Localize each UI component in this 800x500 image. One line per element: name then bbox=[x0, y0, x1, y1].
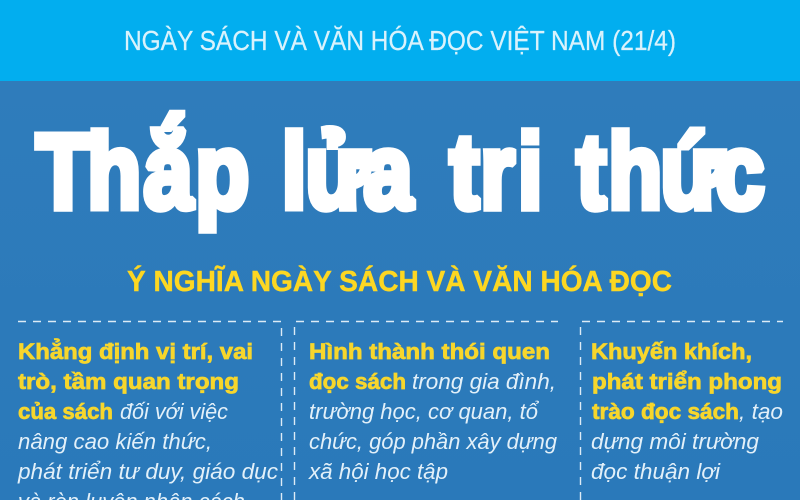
panel: column 1: Khẳng định vị trí, vai bbox=[18, 339, 253, 364]
panel: column 2: xã hội học tập bbox=[308, 459, 448, 484]
panel: column 3 bbox=[580, 322, 783, 500]
panel: column 1: phát triển tư duy, giáo dục bbox=[17, 459, 278, 484]
main title: lửa bbox=[282, 112, 413, 231]
main title: thức bbox=[577, 112, 765, 231]
section heading: Ý NGHĨA NGÀY SÁCH VÀ VĂN HÓA ĐỌC bbox=[127, 264, 672, 298]
panel: column 3: Khuyến khích, bbox=[591, 339, 752, 364]
header band bbox=[0, 0, 800, 81]
panel: column 2: Hình thành thói quen bbox=[309, 339, 550, 364]
main title: tri bbox=[450, 112, 542, 231]
panel: column 1: của sách bbox=[18, 399, 113, 424]
panel: column 2: chức, góp phần xây dựng bbox=[309, 429, 558, 454]
panel: column 2: đọc sách bbox=[309, 369, 406, 394]
header title: NGÀY SÁCH VÀ VĂN HÓA ĐỌC VIỆT NAM (21/4) bbox=[124, 25, 676, 56]
panel: column 3: trào đọc sách bbox=[592, 399, 739, 424]
main title bbox=[36, 112, 765, 231]
panel: column 3: , tạo bbox=[739, 399, 783, 424]
panel: column 2 bbox=[294, 322, 558, 500]
panel: column 1: đối với việc bbox=[120, 399, 228, 424]
panel: column 1 bbox=[17, 322, 281, 500]
panel: column 2: trong gia đình, bbox=[412, 369, 556, 394]
panel: column 3: dựng môi trường bbox=[591, 429, 760, 454]
panel: column 1: nâng cao kiến thức, bbox=[18, 429, 212, 454]
panel: column 2: trường học, cơ quan, tổ bbox=[309, 399, 540, 424]
main title: Thắp bbox=[36, 112, 249, 231]
panel: column 3: đọc thuận lợi bbox=[591, 459, 721, 484]
panel: column 1: trò, tầm quan trọng bbox=[18, 369, 239, 394]
panel: column 3: phát triển phong bbox=[592, 369, 782, 394]
